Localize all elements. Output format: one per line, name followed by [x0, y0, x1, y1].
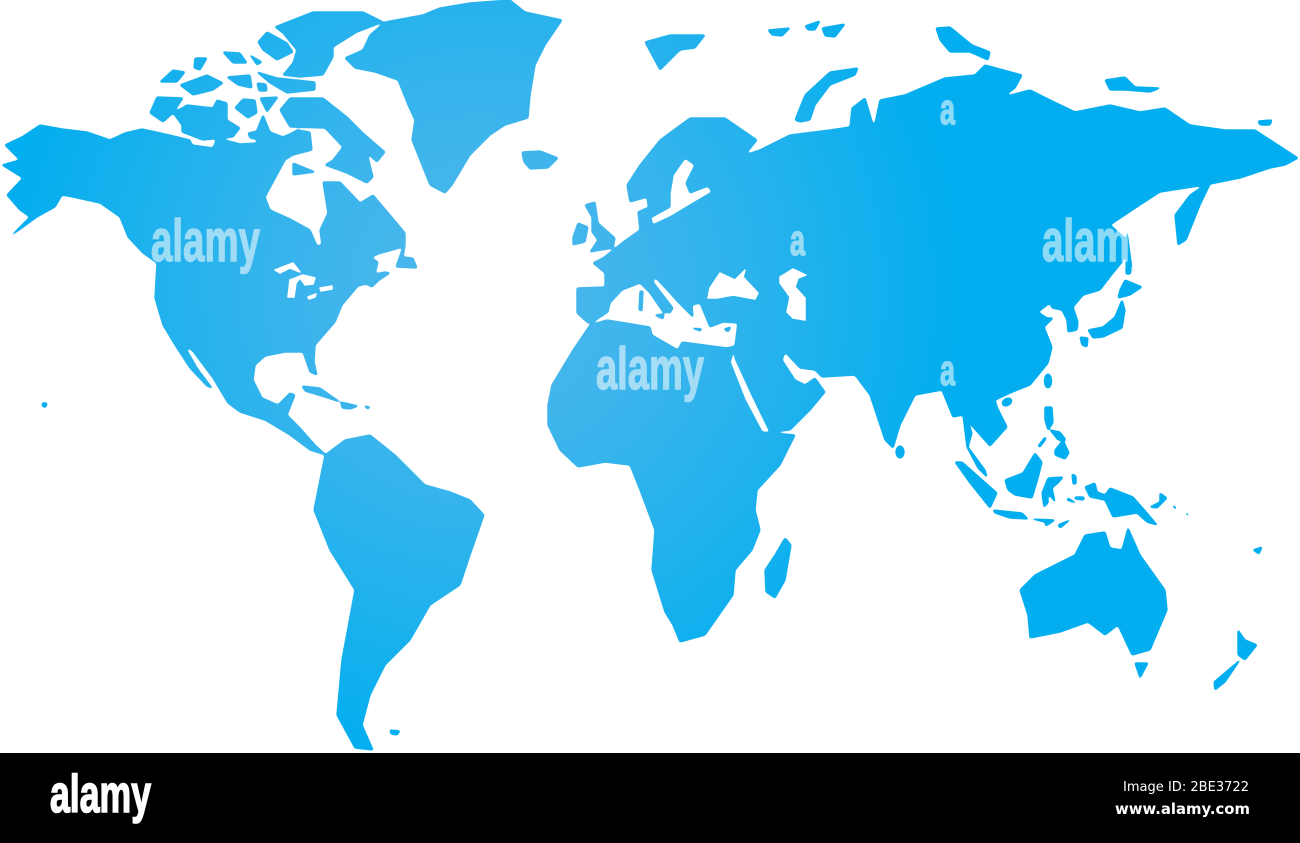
Black Sea [708, 270, 758, 299]
Southampton Island [293, 163, 315, 175]
black footer bar [0, 753, 1300, 843]
Banks Island [150, 97, 183, 122]
Great Lakes [275, 263, 332, 299]
Greenland [345, 0, 562, 193]
watermark letter: Russia west: a [790, 216, 805, 265]
Mediterranean islands [639, 291, 731, 332]
Svalbard [645, 35, 705, 70]
watermark letter: India: a [940, 346, 955, 395]
Falkland Islands [390, 730, 400, 735]
Victoria Island [173, 100, 240, 140]
New Zealand [1214, 630, 1257, 690]
Melville Island [160, 70, 185, 82]
Arctic islands [180, 52, 278, 140]
Arctic Russia islands [768, 21, 1272, 125]
watermark: Asia: alamy [1042, 208, 1151, 274]
Australia [1020, 528, 1167, 655]
watermark: Africa: alamy [596, 336, 704, 402]
watermark: North America: alamy [151, 208, 260, 274]
Caspian Sea [780, 269, 806, 320]
Africa [548, 320, 795, 642]
Southeast Asia islands [896, 374, 1189, 528]
British Isles [573, 202, 615, 252]
Ellesmere Island [275, 12, 383, 77]
watermark letter: Russia north: a [940, 85, 955, 134]
Axel Heiberg Island [258, 32, 293, 60]
website: www.alamy.com [1115, 800, 1250, 818]
Tasmania [1135, 663, 1148, 678]
small Pacific islands [42, 403, 1262, 554]
inland water [275, 263, 806, 320]
Japan and Sakhalin [1080, 232, 1142, 347]
Iceland [522, 151, 558, 169]
South America [314, 435, 484, 750]
image ID: Image ID: 2BE3722 [1123, 779, 1249, 795]
Baffin Island [280, 98, 385, 183]
Eurasia [577, 65, 1298, 477]
Devon Island [257, 72, 315, 93]
Madagascar [765, 538, 791, 598]
North America [2, 12, 417, 455]
Novaya Zemlya [795, 68, 858, 122]
footer logo: alamy [50, 765, 151, 824]
Cuba and Caribbean [302, 386, 370, 409]
